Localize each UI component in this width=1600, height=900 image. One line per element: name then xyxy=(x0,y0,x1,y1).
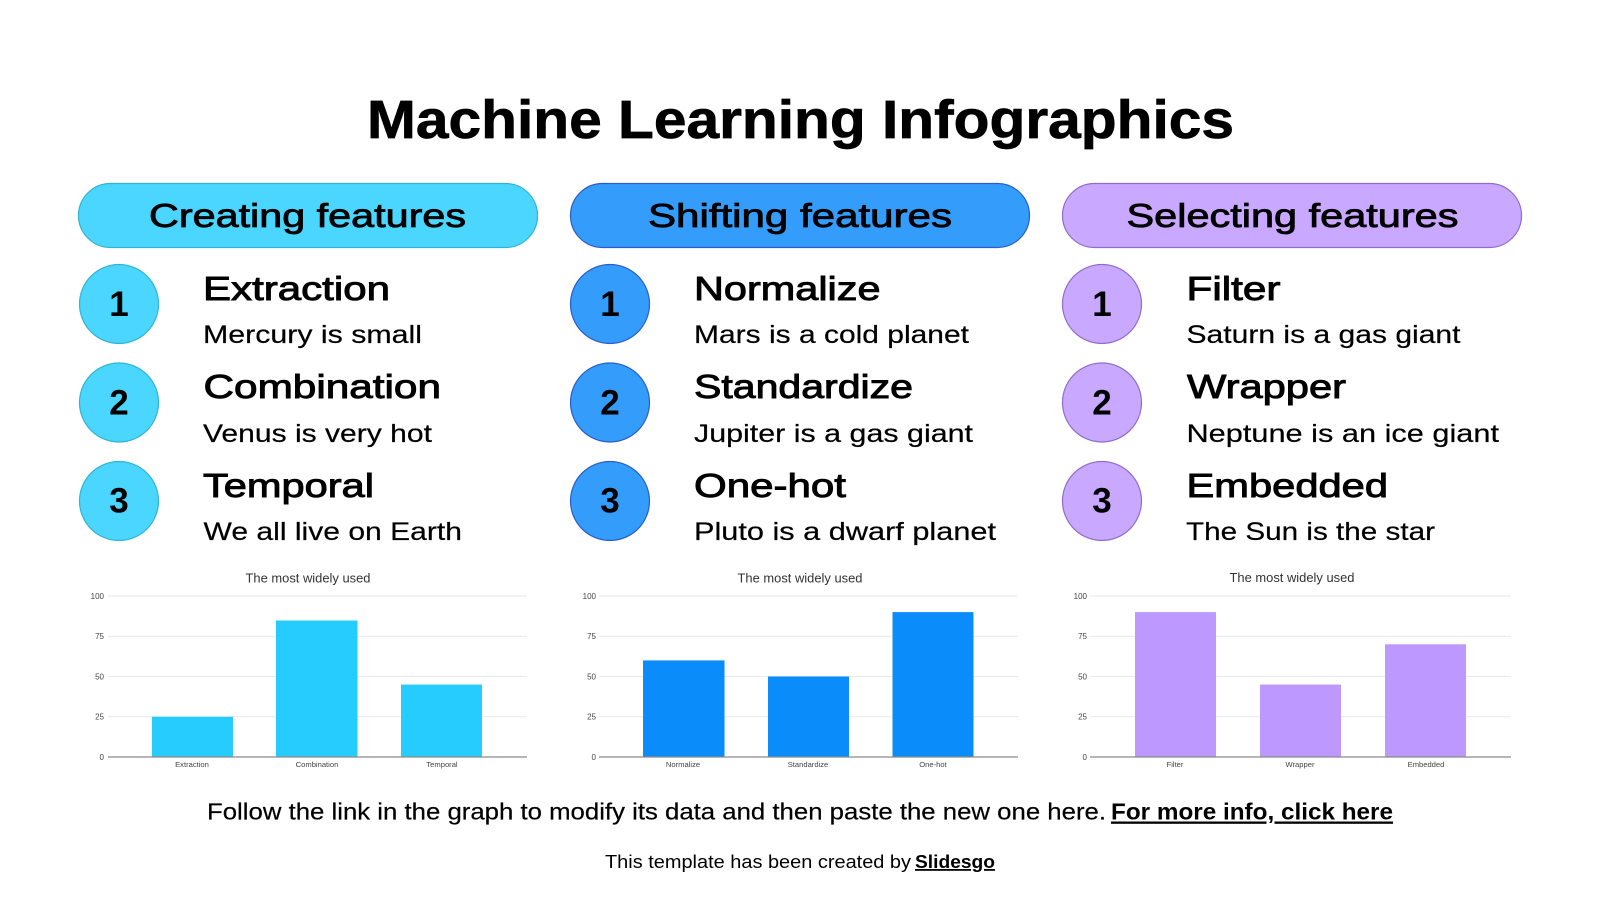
header pill: selecting features xyxy=(1062,184,1522,248)
item 3: embedded: Embedded xyxy=(1186,467,1388,504)
bar chart: creating features: 50 xyxy=(95,672,105,682)
item 1: extraction: Extraction xyxy=(203,270,390,307)
item 3: one-hot: 3 xyxy=(600,482,620,520)
footnote: follow the link: Follow the link in the graph to modify its data and then paste the new one here. xyxy=(207,798,1106,824)
item 2: wrapper: Wrapper xyxy=(1187,368,1346,405)
item 3: one-hot xyxy=(570,462,996,546)
item 1: filter: Saturn is a gas giant xyxy=(1186,321,1461,349)
item 1: normalize: 1 xyxy=(600,285,620,324)
item 2: combination: 2 xyxy=(109,384,129,422)
item 3: embedded xyxy=(1062,462,1435,546)
bar chart: shifting features: Normalize xyxy=(666,760,700,769)
header pill: shifting features: Shifting features xyxy=(648,197,952,234)
item 2: wrapper: Neptune is an ice giant xyxy=(1186,420,1499,448)
item 1: normalize: Normalize xyxy=(694,270,880,307)
item 2: combination: Combination xyxy=(204,368,441,405)
bar chart: selecting features: Wrapper xyxy=(1286,760,1315,769)
item 2: standardize: 2 xyxy=(600,384,620,422)
header pill: creating features xyxy=(78,184,538,248)
item 3: embedded: 3 xyxy=(1092,482,1112,520)
item 1: normalize: Mars is a cold planet xyxy=(694,321,969,349)
bar chart: creating features: 100 xyxy=(91,592,105,601)
item 1: filter: Filter xyxy=(1186,270,1280,307)
item 3: temporal: Temporal xyxy=(203,467,374,504)
bar chart: creating features: Temporal xyxy=(426,760,458,769)
item 2: standardize: Standardize xyxy=(694,368,913,405)
bar chart: selecting features: 75 xyxy=(1078,632,1088,641)
item 1: extraction: 1 xyxy=(109,285,129,324)
item 3: temporal xyxy=(80,462,462,546)
bar chart: selecting features: 0 xyxy=(1083,753,1088,762)
item 3: one-hot: One-hot xyxy=(694,467,846,504)
bar chart: creating features xyxy=(91,570,527,769)
bar chart: selecting features: Filter xyxy=(1167,760,1184,769)
bar chart: shifting features: 0 xyxy=(592,753,597,762)
title: Machine Learning Infographics xyxy=(367,90,1234,150)
bar chart: shifting features: 100 xyxy=(583,592,597,601)
item 1: filter: 1 xyxy=(1092,285,1112,324)
item 1: extraction xyxy=(80,264,422,349)
bar chart: shifting features: One-hot xyxy=(919,760,948,769)
header pill: creating features: Creating features xyxy=(149,197,466,234)
bar chart: creating features: 75 xyxy=(95,632,105,641)
item 1: extraction: Mercury is small xyxy=(203,321,422,349)
credit: slidesgo: Slidesgo xyxy=(915,852,995,872)
panel: creating features xyxy=(78,184,538,769)
bar chart: selecting features: Embedded xyxy=(1408,760,1444,769)
credit: slidesgo: This template has been created by xyxy=(605,852,911,872)
panel: shifting features xyxy=(570,184,1030,769)
bar chart: creating features: Combination xyxy=(296,760,338,769)
footnote: follow the link: For more info, click here xyxy=(1111,798,1393,824)
bar chart: selecting features: 50 xyxy=(1078,672,1088,682)
item 1: filter xyxy=(1062,264,1461,349)
bar chart: shifting features: The most widely used xyxy=(738,570,862,586)
item 3: one-hot: Pluto is a dwarf planet xyxy=(694,518,996,546)
bar chart: shifting features: Standardize xyxy=(788,760,828,769)
bar chart: selecting features xyxy=(1074,570,1511,769)
item 2: wrapper xyxy=(1062,363,1499,448)
item 2: combination: Venus is very hot xyxy=(203,420,432,448)
header pill: shifting features xyxy=(570,184,1030,248)
bar chart: creating features: Extraction xyxy=(175,760,209,769)
item 2: wrapper: 2 xyxy=(1092,384,1112,422)
header pill: selecting features: Selecting features xyxy=(1126,197,1458,234)
footnote: follow the link xyxy=(207,798,1393,824)
item 3: embedded: The Sun is the star xyxy=(1186,518,1435,546)
bar chart: selecting features: 100 xyxy=(1074,592,1088,601)
bar chart: shifting features: 25 xyxy=(587,712,597,722)
bar chart: shifting features xyxy=(583,570,1018,769)
item 1: normalize xyxy=(570,264,969,349)
bar chart: selecting features: The most widely used xyxy=(1230,570,1354,585)
bar chart: creating features: The most widely used xyxy=(246,570,370,586)
bar chart: creating features: 25 xyxy=(95,712,105,722)
item 2: combination xyxy=(80,363,441,448)
bar chart: creating features: 0 xyxy=(100,753,105,762)
bar chart: selecting features: 25 xyxy=(1078,712,1088,722)
item 2: standardize: Jupiter is a gas giant xyxy=(694,420,973,448)
item 2: standardize xyxy=(570,363,973,448)
bar chart: shifting features: 75 xyxy=(587,632,597,641)
bar chart: shifting features: 50 xyxy=(587,672,597,682)
item 3: temporal: We all live on Earth xyxy=(204,518,462,546)
item 3: temporal: 3 xyxy=(109,482,129,520)
panel: selecting features xyxy=(1062,184,1522,769)
